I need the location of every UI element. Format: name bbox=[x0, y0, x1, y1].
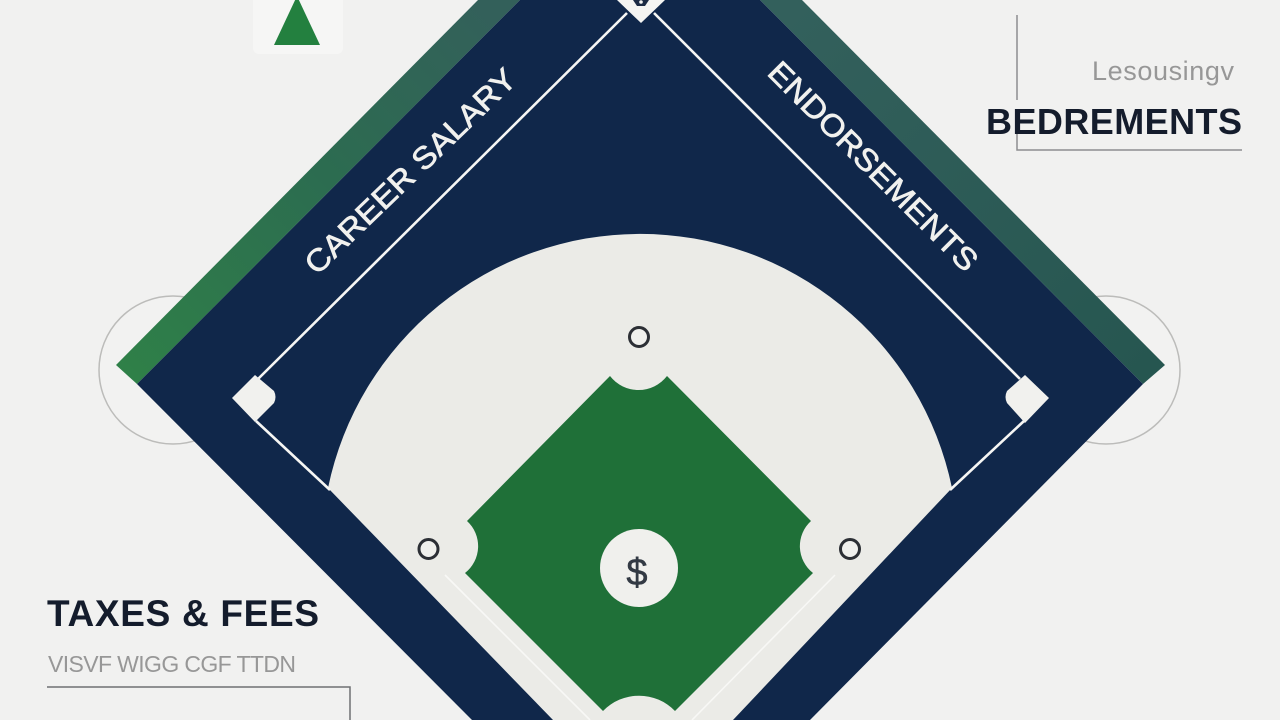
callout heading: BEDREMENTS bbox=[986, 101, 1242, 142]
navy field bbox=[137, 0, 1143, 720]
base: right bbox=[1006, 375, 1049, 423]
heading: TAXES & FEES bbox=[47, 593, 319, 634]
center circle bbox=[600, 529, 678, 607]
label: endorsements: ENDORSEMENTS bbox=[761, 54, 985, 278]
decorative circle: left bbox=[99, 296, 247, 444]
callout: top right bbox=[986, 15, 1242, 150]
decorative circle: right bbox=[1032, 296, 1180, 444]
green band: left bbox=[116, 0, 520, 384]
base: top plate bbox=[617, 0, 665, 23]
dollar sign: $ bbox=[626, 552, 648, 594]
green band: right bbox=[760, 0, 1165, 384]
infield arc area bbox=[328, 234, 952, 720]
caption: VISVF WIGG CGF TTDN bbox=[48, 651, 296, 677]
base: left bbox=[232, 375, 276, 422]
faint inner lines bbox=[445, 575, 835, 720]
callout: taxes and fees bbox=[47, 593, 350, 720]
marker: left bbox=[419, 540, 438, 558]
foul lines bbox=[256, 13, 1024, 490]
callout bracket bbox=[1017, 15, 1242, 150]
label: career salary: CAREER SALARY bbox=[298, 61, 523, 281]
marker: top bbox=[630, 328, 648, 346]
marker: right bbox=[840, 540, 860, 558]
bracket bbox=[47, 687, 350, 720]
infield green diamond bbox=[465, 376, 813, 711]
icon: green triangle on card bbox=[253, 0, 343, 54]
callout caption: Lesousingv bbox=[1092, 56, 1234, 86]
